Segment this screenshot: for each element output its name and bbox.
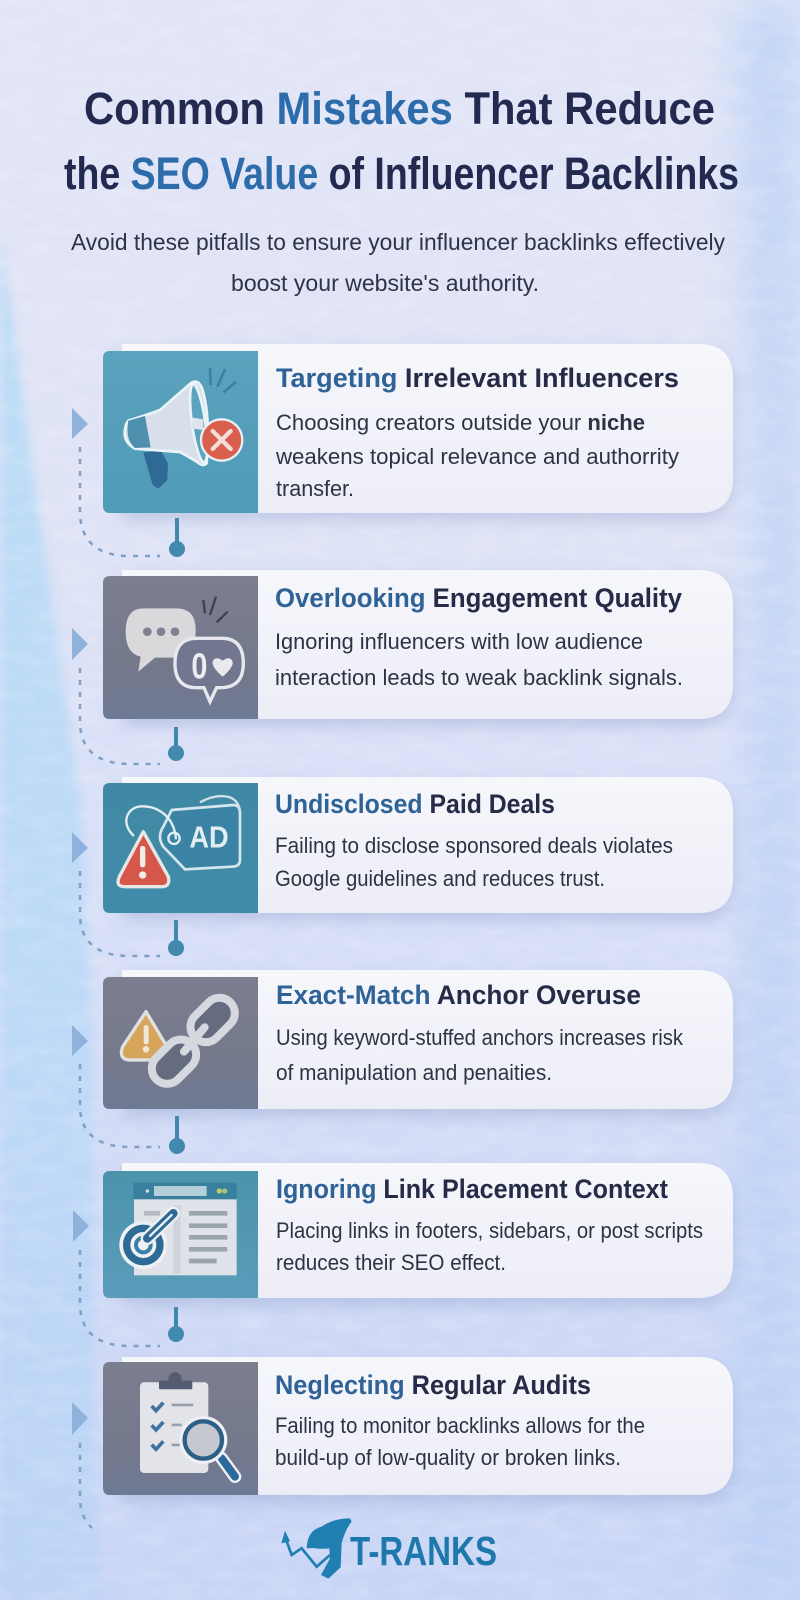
timeline connector 4: [72, 1025, 185, 1154]
heading: Ignoring Link Placement Context: [276, 1174, 668, 1204]
heading: Undisclosed Paid Deals: [275, 789, 555, 819]
body text: [276, 1218, 703, 1275]
body text: Placing links in footers, sidebars, or post scripts: [276, 1218, 703, 1243]
body text: [276, 1025, 684, 1085]
icon: AD tag with warning triangle: [118, 796, 240, 887]
icon: megaphone with red X: [125, 368, 242, 489]
logo: T-RANKS: [281, 1518, 497, 1579]
body text: [275, 1413, 645, 1470]
timeline connector 2: [72, 628, 184, 764]
heading: Targeting Irrelevant Influencers: [276, 363, 679, 393]
body text: interaction leads to weak backlink signals.: [275, 665, 683, 690]
card 1: targeting irrelevant influencers: [103, 344, 733, 513]
body text: of manipulation and penaities.: [276, 1060, 552, 1085]
heading: Neglecting Regular Audits: [275, 1370, 591, 1400]
subtitle: [71, 229, 725, 296]
timeline connector 3: [72, 832, 184, 956]
logo: T-RANKS: T-RANKS: [350, 1528, 497, 1574]
timeline connector 1: [72, 408, 185, 557]
icon: clipboard with magnifying glass: [140, 1372, 235, 1477]
heading: Overlooking Engagement Quality: [275, 583, 682, 613]
body text: [275, 833, 673, 891]
card 6: neglecting regular audits: [103, 1357, 733, 1495]
body text: [275, 629, 683, 690]
icon: chain link with warning triangle: [121, 991, 241, 1090]
subtitle: Avoid these pitfalls to ensure your influencer backlinks effectively: [71, 229, 725, 255]
body text: Google guidelines and reduces trust.: [275, 866, 605, 891]
card 5: ignoring link placement context: [103, 1163, 733, 1298]
body text: Failing to monitor backlinks allows for the: [275, 1413, 645, 1438]
body text: transfer.: [276, 476, 354, 501]
body text: build-up of low-quality or broken links.: [275, 1445, 621, 1470]
body text: reduces their SEO effect.: [276, 1250, 506, 1275]
body text: weakens topical relevance and authorrity: [275, 444, 679, 469]
timeline connector 5: [73, 1210, 184, 1346]
icon: chat bubbles with zero likes: 0: [191, 646, 207, 687]
card 4: exact-match anchor overuse: [103, 970, 733, 1109]
icon: AD tag with warning triangle: AD: [189, 820, 229, 854]
subtitle: boost your website's authority.: [231, 270, 539, 296]
body text: Choosing creators outside your niche: [276, 410, 645, 435]
heading: Exact-Match Anchor Overuse: [276, 980, 641, 1010]
body text: Using keyword-stuffed anchors increases risk: [276, 1025, 684, 1050]
title: Common Mistakes That Reduce: [84, 83, 715, 134]
body text: [275, 410, 679, 501]
card 2: overlooking engagement quality: [103, 570, 733, 719]
card 3: undisclosed paid deals: [103, 777, 733, 913]
body text: Ignoring influencers with low audience: [275, 629, 643, 654]
icon: browser page with target link: [119, 1183, 237, 1275]
body text: Failing to disclose sponsored deals violates: [275, 833, 673, 858]
title: [64, 83, 739, 199]
icon: shark with rising arrow: [281, 1518, 352, 1579]
icon: chat bubbles with zero likes: [126, 597, 243, 702]
timeline connector 6: [72, 1402, 92, 1528]
